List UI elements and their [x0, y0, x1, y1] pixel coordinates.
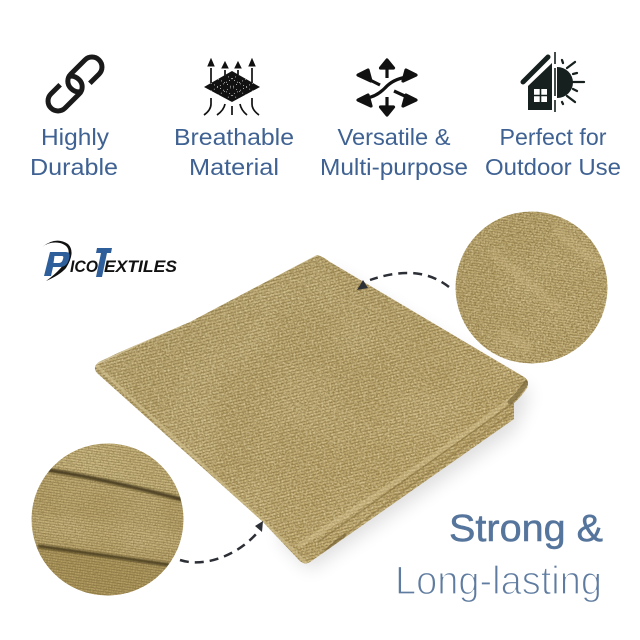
heading: Strong & Long-lasting: Long-lasting — [395, 559, 602, 603]
icon: chain link — [44, 53, 106, 115]
fold layers — [97, 255, 528, 562]
heading: Strong & Long-lasting — [395, 508, 603, 603]
feature: breathable material — [174, 59, 294, 180]
label: Perfect for Outdoor Use: Perfect for — [500, 124, 607, 150]
label: Perfect for Outdoor Use: Outdoor Use — [485, 154, 621, 180]
burlap fabric — [85, 245, 540, 575]
logo: PicoTextiles: EXTILES — [104, 257, 178, 276]
feature: versatile — [320, 60, 468, 180]
heading: Strong & Long-lasting: Strong & — [449, 508, 603, 550]
arrow: top dashed callout — [357, 273, 449, 290]
feature: highly durable — [30, 53, 118, 180]
logo: PicoTextiles — [42, 241, 178, 281]
arrow: bottom dashed callout — [180, 521, 263, 562]
label: Breathable Material: Breathable — [174, 124, 294, 150]
icon: house and sun — [523, 52, 584, 112]
icon: crossing arrows — [358, 60, 416, 115]
icon: breathable mesh — [204, 59, 260, 115]
fabric shadow — [280, 270, 530, 570]
label: Highly Durable: Highly — [41, 124, 109, 150]
feature: outdoor use — [485, 52, 621, 180]
logo: PicoTextiles: ICO — [70, 257, 98, 276]
detail circle: folded cloth close-up — [30, 440, 185, 600]
label: Highly Durable: Durable — [30, 154, 118, 180]
label: Breathable Material: Material — [189, 154, 279, 180]
label: Versatile & Multi-purpose: Multi-purpose — [320, 154, 468, 180]
detail circle: weave close-up — [455, 211, 608, 364]
folded fabric body — [94, 255, 528, 564]
label: Versatile & Multi-purpose: Versatile & — [338, 124, 451, 150]
